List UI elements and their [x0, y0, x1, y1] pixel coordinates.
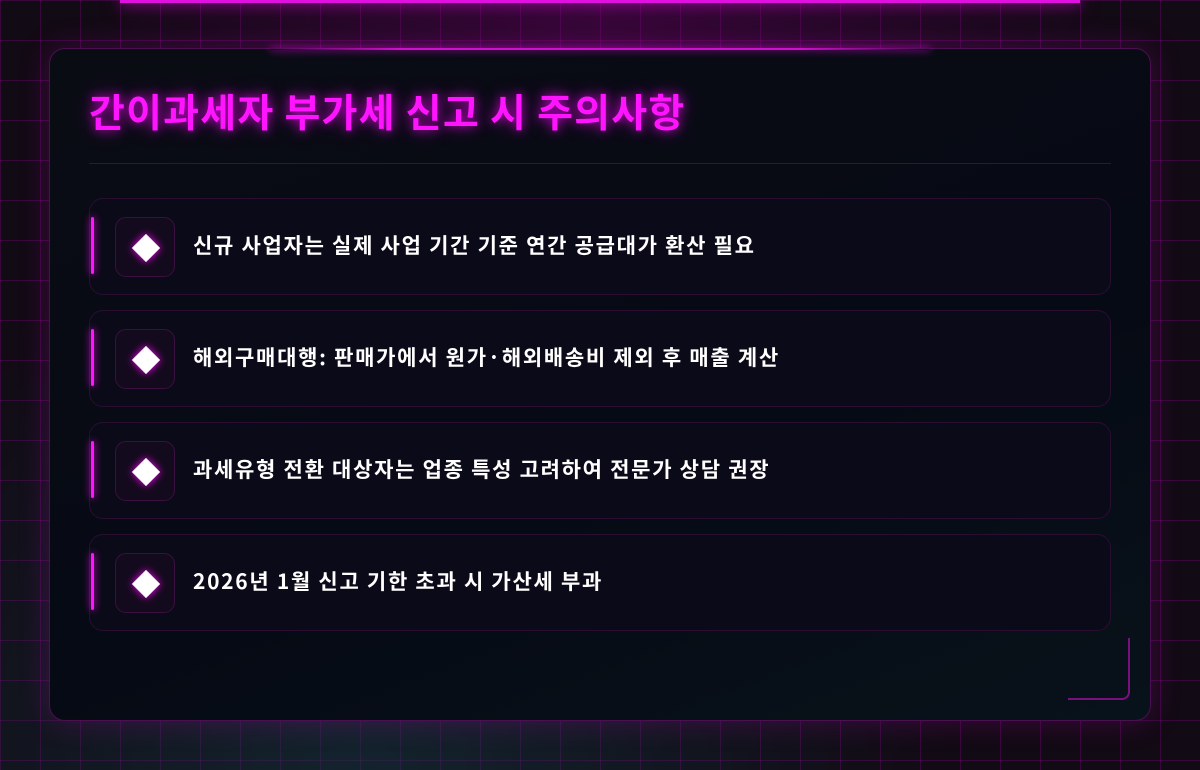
text 3: 과세유형 전환 대상자는 업종 특성 고려하여 전문가 상담 권장	[193, 454, 770, 484]
text 1: 신규 사업자는 실제 사업 기간 기준 연간 공급대가 환산 필요	[193, 230, 756, 260]
icon: diamond	[115, 217, 175, 277]
item 1	[89, 198, 1111, 295]
icon: diamond	[115, 329, 175, 389]
title: 간이과세자 부가세 신고 시 주의사항	[89, 83, 685, 139]
item 2	[89, 310, 1111, 407]
icon: diamond	[115, 441, 175, 501]
item 4	[89, 534, 1111, 631]
text 4: 2026년 1월 신고 기한 초과 시 가산세 부과	[193, 566, 603, 596]
item 3	[89, 422, 1111, 519]
icon: diamond	[115, 553, 175, 613]
text 2: 해외구매대행: 판매가에서 원가·해외배송비 제외 후 매출 계산	[193, 342, 780, 372]
